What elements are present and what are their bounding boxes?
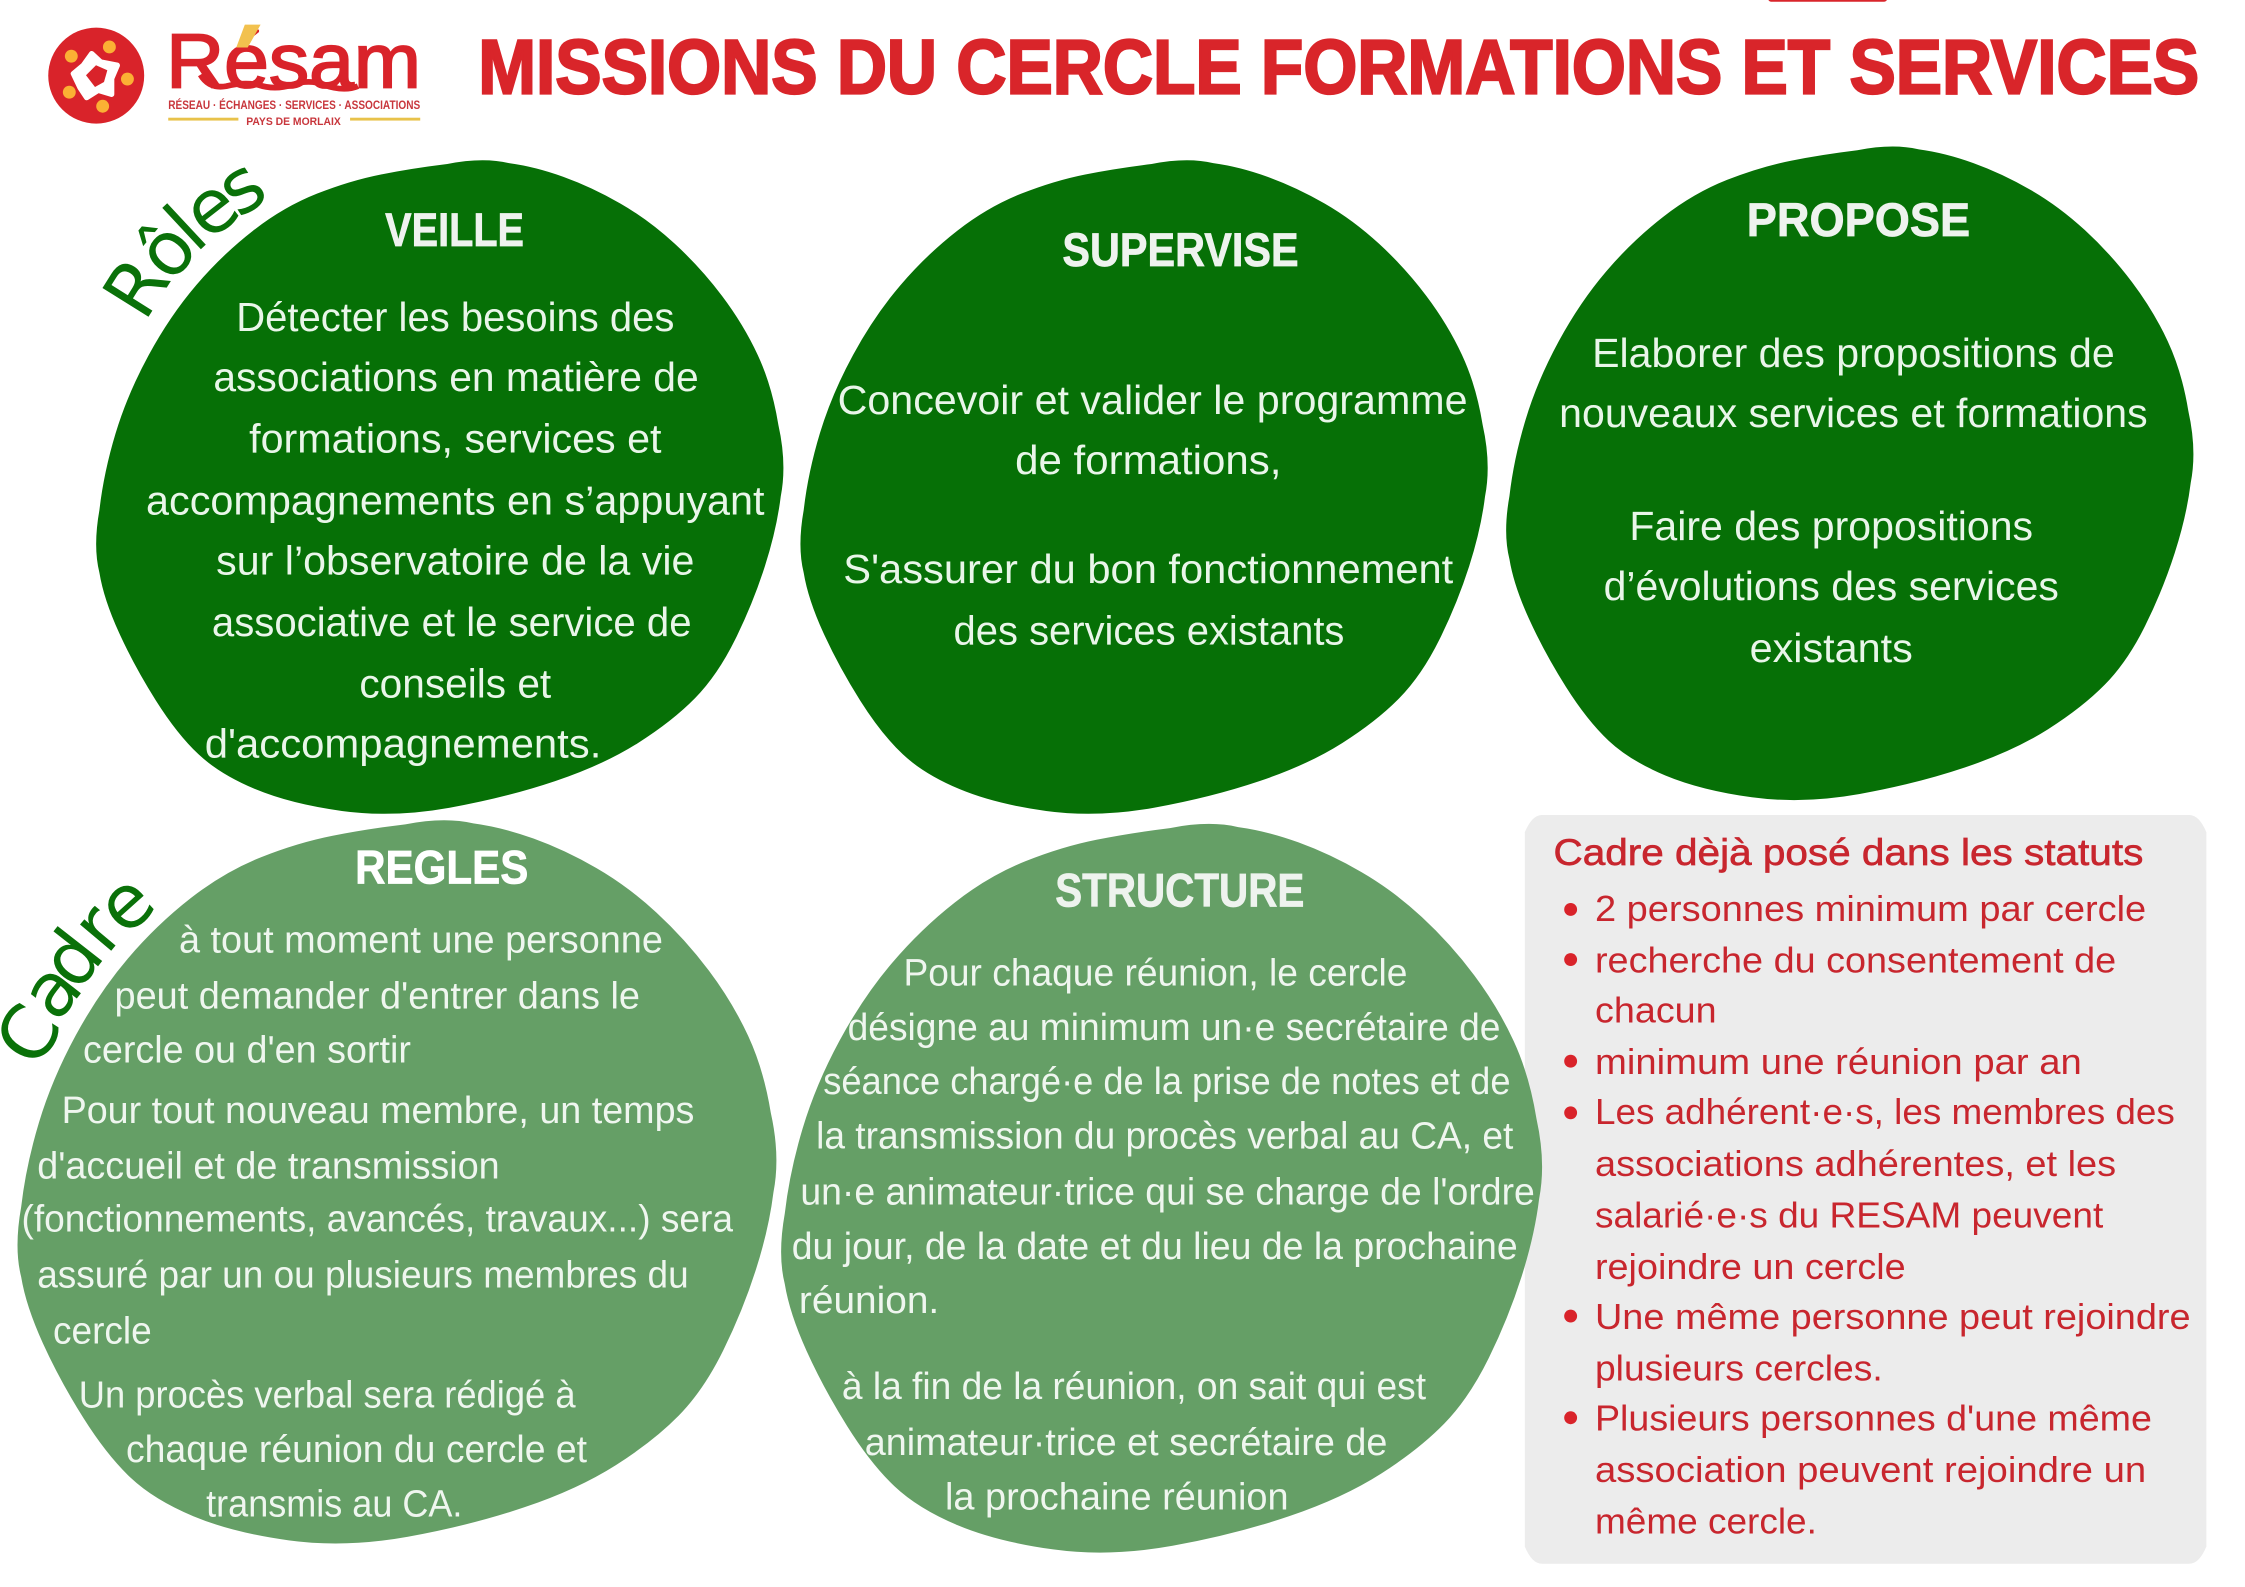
body text: d'accompagnements. [205, 721, 601, 767]
background card [1525, 815, 2206, 1564]
panel: STRUCTURE [781, 824, 1542, 1553]
blob: dark green [1506, 147, 2193, 800]
body text [838, 377, 1468, 654]
bullet list: salarié·e·s du RESAM peuvent [1595, 1195, 2103, 1235]
body text: Un procès verbal sera rédigé à [79, 1375, 576, 1417]
heading: STRUCTURE [1055, 865, 1304, 918]
body text: assuré par un ou plusieurs membres du [37, 1254, 689, 1296]
body text: (fonctionnements, avancés, travaux...) sera [21, 1199, 734, 1241]
body text: désigne au minimum un·e secrétaire de [848, 1007, 1500, 1049]
label: Rôles: Rôles [86, 140, 281, 333]
heading: Cadre dèjà posé dans les statuts [1553, 831, 2143, 873]
body text: Pour tout nouveau membre, un temps [62, 1090, 694, 1132]
body text: du jour, de la date et du lieu de la prochaine [792, 1226, 1518, 1268]
bullet list: Une même personne peut rejoindre [1595, 1297, 2191, 1337]
territory label: PAYS DE MORLAIX [246, 116, 341, 128]
bullet list: recherche du consentement de [1595, 940, 2116, 980]
bullet list: plusieurs cercles. [1595, 1349, 1883, 1389]
body text: chaque réunion du cercle et [126, 1429, 587, 1471]
bullet list: rejoindre un cercle [1595, 1247, 1906, 1287]
wordmark: Résam [166, 19, 421, 105]
body text [21, 919, 734, 1526]
body text: Pour chaque réunion, le cercle [903, 952, 1407, 994]
body text [792, 952, 1535, 1518]
bullet list: associations adhérentes, et les [1595, 1144, 2116, 1184]
body text: d'accueil et de transmission [37, 1146, 500, 1188]
bullet list [1564, 889, 2191, 1542]
body text: cercle [53, 1310, 152, 1352]
panel: VEILLE [96, 160, 783, 814]
body text: sur l’observatoire de la vie [216, 537, 694, 583]
body text [1559, 330, 2148, 671]
blob: light green [781, 824, 1542, 1553]
panel: REGLES [18, 820, 776, 1543]
body text: peut demander d'entrer dans le [115, 975, 640, 1017]
body text: de formations, [1015, 437, 1281, 483]
body text: existants [1750, 625, 1913, 671]
body text: des services existants [954, 608, 1344, 654]
panel: cadre déjà posé dans les statuts [1525, 815, 2206, 1564]
logo: Résam [48, 19, 421, 128]
heading: PROPOSE [1747, 194, 1970, 247]
body text: conseils et [359, 661, 552, 707]
bullet list: même cercle. [1595, 1502, 1817, 1542]
body text: associative et le service de [212, 599, 692, 645]
body text: la transmission du procès verbal au CA, et [816, 1116, 1514, 1158]
icon: red circle with star and dots [48, 28, 144, 124]
body text: S'assurer du bon fonctionnement [843, 546, 1454, 592]
heading: SUPERVISE [1062, 224, 1299, 277]
body text: à la fin de la réunion, on sait qui est [842, 1366, 1426, 1408]
logo accent [236, 25, 261, 48]
body text: transmis au CA. [206, 1484, 462, 1526]
body text: accompagnements en s’appuyant [146, 477, 765, 523]
body text: Elaborer des propositions de [1592, 330, 2115, 376]
body text: séance chargé·e de la prise de notes et de [823, 1061, 1511, 1103]
body text: cercle ou d'en sortir [83, 1030, 411, 1072]
blob: light green [18, 820, 776, 1543]
body text: Faire des propositions [1629, 503, 2033, 549]
body text: formations, services et [249, 416, 662, 462]
blob: dark green [800, 160, 1488, 814]
wordmark wave [200, 75, 358, 89]
bullet list: chacun [1595, 991, 1717, 1031]
blob: dark green [96, 160, 783, 814]
bullet list: association peuvent rejoindre un [1595, 1450, 2146, 1490]
bullet list: 2 personnes minimum par cercle [1595, 889, 2146, 929]
body text: Détecter les besoins des [236, 294, 674, 340]
body text: animateur·trice et secrétaire de [865, 1422, 1387, 1464]
body text: Concevoir et valider le programme [838, 377, 1468, 423]
panel: PROPOSE [1506, 147, 2193, 800]
body text: d’évolutions des services [1604, 563, 2059, 609]
bullet list: Plusieurs personnes d'une même [1595, 1399, 2152, 1439]
heading: VEILLE [385, 204, 524, 257]
body text: à tout moment une personne [179, 919, 663, 961]
bullet list: minimum une réunion par an [1595, 1042, 2082, 1082]
body text: réunion. [799, 1280, 939, 1322]
panel: SUPERVISE [800, 160, 1488, 814]
body text: la prochaine réunion [945, 1476, 1289, 1518]
heading: REGLES [355, 842, 528, 895]
body text [146, 294, 765, 767]
tagline: RÉSEAU · ÉCHANGES · SERVICES · ASSOCIATIONS [168, 97, 420, 112]
body text: nouveaux services et formations [1559, 390, 2148, 436]
bullet list: Les adhérent·e·s, les membres des [1595, 1092, 2175, 1132]
body text: associations en matière de [213, 354, 699, 400]
body text: un·e animateur·trice qui se charge de l'ordre [800, 1171, 1535, 1213]
